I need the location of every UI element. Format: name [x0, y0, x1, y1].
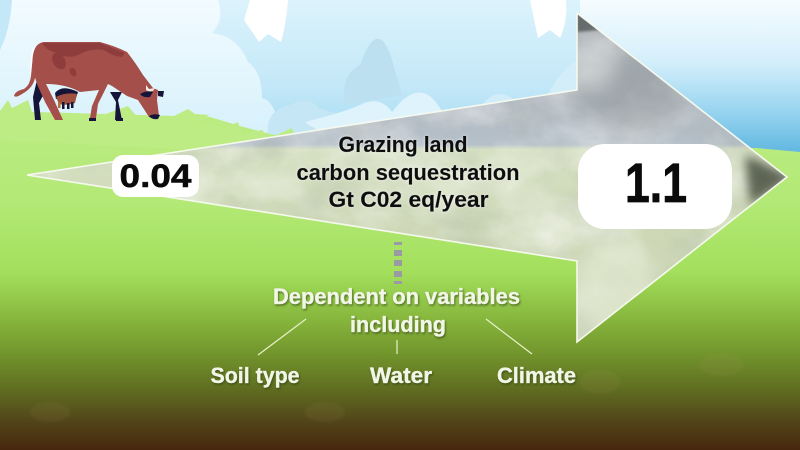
value badge: 0.04	[112, 155, 199, 197]
arrow heading	[296, 132, 520, 212]
label: climate: Climate	[497, 363, 576, 388]
subheading: dependent on variables	[273, 284, 520, 337]
face details	[140, 91, 153, 97]
arrow heading: Grazing land	[338, 132, 468, 157]
subheading: dependent on variables: Dependent on variables	[273, 284, 520, 309]
arrow: smoke filled	[20, 10, 795, 345]
value badge: 1.1	[578, 144, 732, 229]
clouds	[0, 0, 580, 140]
branch lines	[258, 319, 532, 355]
far legs	[33, 67, 46, 120]
ground with hill	[0, 111, 800, 450]
arrow heading: carbon sequestration	[296, 160, 520, 185]
arrow heading: Gt C02 eq/year	[328, 187, 489, 212]
subheading: dependent on variables: including	[350, 312, 446, 337]
label: water: Water	[370, 363, 432, 388]
sky background	[0, 0, 800, 175]
value badge: 0.04: 0.04	[120, 158, 192, 194]
tail	[14, 48, 35, 97]
label: soil type: Soil type	[210, 363, 300, 388]
udder	[56, 93, 77, 105]
faint ground tufts	[30, 354, 744, 422]
value badge: 1.1: 1.1	[625, 151, 687, 214]
grass tufts	[0, 100, 296, 150]
body patches	[42, 43, 125, 57]
dotted connector	[394, 242, 402, 284]
body, head and legs	[33, 42, 159, 120]
icon: grazing cow	[14, 42, 164, 121]
